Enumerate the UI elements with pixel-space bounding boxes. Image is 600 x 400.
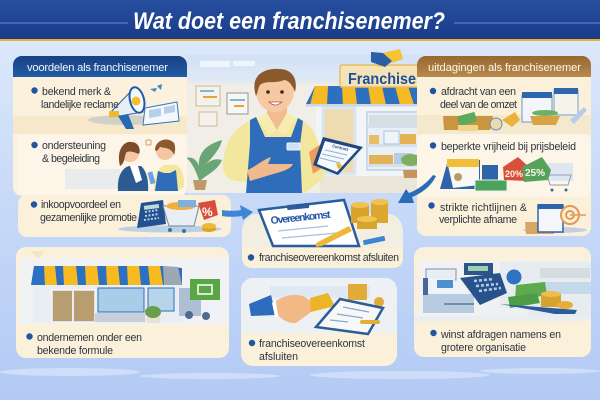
icon: calendar [538, 204, 563, 232]
icon: badge [506, 270, 522, 284]
item: ondersteuning [31, 139, 184, 191]
card: winst afdragen [414, 247, 591, 357]
card: ondernemen: ondernemen onder een [37, 332, 142, 344]
icon: eraser [363, 236, 385, 245]
icon: handshake [249, 293, 335, 323]
icon: megaphone [88, 84, 179, 129]
panel background [417, 56, 591, 236]
arrow: to contract [222, 205, 253, 220]
icon: percent tag: % [202, 205, 213, 219]
icon: shopping cart [547, 163, 573, 192]
awning [31, 266, 182, 285]
store backdrop [187, 55, 422, 193]
hair [254, 69, 296, 96]
icon: banknote [475, 165, 507, 191]
panel heading [417, 56, 591, 77]
panel: uitdagingen [417, 56, 591, 236]
shirt [223, 112, 324, 193]
icon: sale tag 25% [522, 157, 551, 182]
store front [316, 106, 421, 178]
item: ondersteuning: & begeleiding [42, 153, 100, 165]
card: handshake [241, 278, 397, 366]
panel: voordelen [13, 56, 187, 196]
franchise sign [340, 49, 422, 88]
background texture at the bottom [0, 368, 600, 379]
wall posters [196, 86, 248, 126]
panel background [13, 56, 187, 196]
item: afdracht: deel van de omzet [440, 99, 517, 111]
item card: inkoopvoordeel: inkoopvoordeel en [41, 199, 121, 211]
panel heading: uitdagingen als franchisenemer [428, 62, 581, 74]
icon: shopping basket [163, 200, 199, 233]
item: beperkte vrijheid: beperkte vrijheid bij prijsbeleid [441, 141, 576, 153]
title: Wat doet een franchisenemer? [133, 8, 445, 35]
illustration: shopfront [19, 258, 229, 324]
card: ondernemen [16, 247, 229, 358]
panel heading: voordelen als franchisenemer [27, 62, 168, 74]
icon: sale tag 20%: 20% [505, 169, 523, 179]
item: bekend merk: bekend merk & [42, 86, 111, 98]
neck and collar [267, 106, 287, 130]
icon: target [561, 206, 586, 224]
open hand [247, 157, 293, 181]
icon: pen [316, 226, 352, 247]
icon: two people talking [118, 139, 184, 191]
contract tablet [313, 137, 363, 175]
icon: clipboard [259, 200, 359, 246]
icon: clipboard and signature [316, 299, 383, 334]
apron [246, 117, 303, 193]
item: strikte richtlijnen: strikte richtlijnen & [440, 202, 527, 214]
icon: percent tag [198, 200, 218, 220]
item: bekend merk: landelijke reclame [41, 99, 119, 111]
icon: cash register [423, 269, 474, 313]
icon: coin stack [348, 284, 384, 307]
icon: calendars and basket [522, 88, 587, 125]
item card: inkoopvoordeel [18, 195, 231, 237]
icon: cash box [443, 112, 520, 131]
card: winst afdragen: grotere organisatie [441, 342, 526, 354]
item card: inkoopvoordeel: gezamenlijke promotie [40, 212, 137, 224]
item: strikte richtlijnen [428, 202, 587, 234]
card: overeenkomst: franchiseovereenkomst afsluiten [259, 252, 399, 264]
icon: handshake on the sign [370, 49, 403, 67]
head [256, 70, 294, 112]
header band [0, 0, 600, 41]
contract title: Overeenkomst [270, 209, 331, 227]
item: bekend merk [31, 84, 179, 129]
hand holding tablet [309, 144, 325, 174]
icon: coins and tray [500, 291, 577, 314]
icon: sale tag 20% [503, 157, 529, 181]
card: winst afdragen: winst afdragen namens en [440, 329, 561, 341]
icon: calculator [137, 200, 166, 228]
icon: shop awning [306, 86, 422, 106]
icon: coins [202, 223, 216, 232]
icon: banknotes [508, 282, 547, 308]
icon: desk calendar [440, 159, 480, 189]
item: afdracht [430, 86, 587, 131]
item: strikte richtlijnen: verplichte afname [439, 214, 517, 226]
icon: coin stacks [351, 199, 389, 229]
card: handshake: franchiseovereenkomst [259, 338, 365, 350]
person: franchisee [223, 69, 363, 193]
plant [145, 306, 161, 323]
icon: card terminal [460, 263, 507, 305]
item: ondersteuning: ondersteuning [42, 140, 106, 152]
icon: potted plant [186, 140, 222, 190]
card: handshake: afsluiten [259, 351, 298, 363]
card: overeenkomst [242, 199, 403, 268]
delivery van [179, 279, 223, 320]
card: ondernemen: bekende formule [37, 345, 113, 357]
sign text: Franchise [348, 71, 416, 88]
icon: box [525, 222, 554, 234]
item: beperkte vrijheid [430, 141, 576, 192]
icon: sale tag 25%: 25% [525, 168, 545, 179]
arrow: from challenges to contract [398, 175, 436, 203]
contract tablet: Contract [332, 143, 350, 152]
panel heading [13, 56, 187, 77]
item: afdracht: afdracht van een [441, 86, 516, 98]
